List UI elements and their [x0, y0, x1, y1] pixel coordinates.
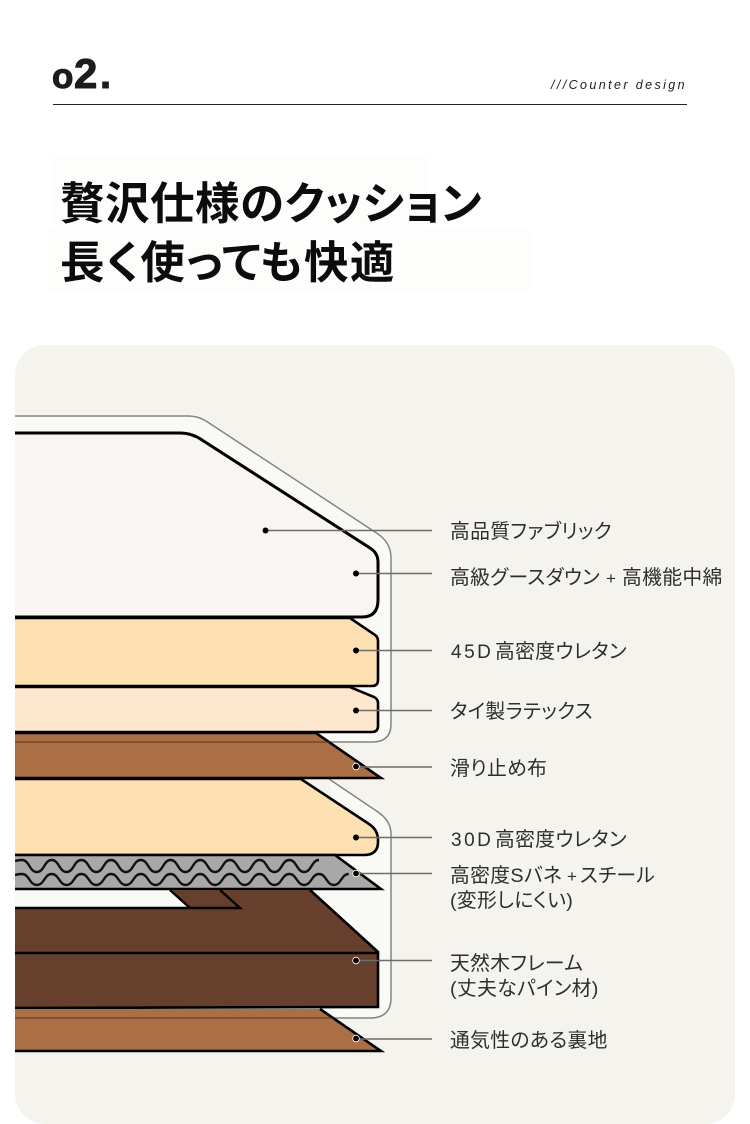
- leader: 30D foam: [353, 834, 432, 840]
- leader: fabric: [262, 528, 432, 534]
- section number: 2: [74, 50, 97, 97]
- lower cover edge: [329, 779, 391, 1018]
- section number: o: [52, 57, 73, 96]
- label: fabric: 高品質ファブリック: [450, 520, 612, 543]
- header rule: [53, 104, 687, 105]
- label: frame: 天然木フレーム: [450, 953, 583, 975]
- layer: breathable lining: [5, 1009, 381, 1051]
- section number: .: [100, 53, 111, 97]
- label: lining: 通気性のある裏地: [450, 1030, 608, 1052]
- layer: S-spring: [5, 855, 381, 889]
- section tag: ///Counter design: [550, 78, 687, 92]
- layer: 45D foam: [5, 618, 378, 686]
- label: spring: スチール: [580, 865, 655, 887]
- lower cover fill: [5, 779, 391, 1018]
- label: down: +: [606, 569, 616, 588]
- layer: anti-slip cloth: [5, 733, 381, 778]
- label: spring: 高密度Sバネ: [450, 865, 562, 887]
- panel: background: [15, 345, 735, 1124]
- label: frame: (丈夫なパイン材): [450, 978, 599, 1000]
- leader: spring: [353, 870, 432, 877]
- title: [48, 155, 530, 292]
- leader: frame: [353, 957, 432, 964]
- left page margin: [0, 400, 15, 1080]
- leader: anti-slip cloth: [353, 763, 432, 770]
- label: spring: (変形しにくい): [450, 890, 573, 912]
- label: anti-slip cloth: 滑り止め布: [450, 758, 547, 780]
- leader: lining: [353, 1035, 432, 1042]
- title: 贅沢仕様のクッション: [60, 167, 482, 232]
- label: down: 高機能中綿: [622, 567, 723, 589]
- layer: 30D foam: [5, 779, 378, 855]
- leader: 45D foam: [353, 648, 432, 654]
- label: 45D foam: 高密度ウレタン: [495, 641, 627, 663]
- label: spring: +: [567, 867, 577, 886]
- label: 30D foam: 30D: [451, 830, 493, 851]
- layer: wooden frame: [5, 890, 378, 1008]
- leader: down: [353, 570, 432, 576]
- layer: down cushion: [5, 433, 378, 617]
- label: down: 高級グースダウン: [450, 567, 600, 589]
- layer: latex: [5, 687, 378, 732]
- label: latex: タイ製ラテックス: [450, 701, 593, 723]
- upper cover outline: [5, 416, 391, 742]
- leader: latex: [353, 708, 432, 714]
- label: 30D foam: 高密度ウレタン: [495, 829, 627, 851]
- title: 長く使っても快適: [60, 226, 396, 291]
- label: 45D foam: 45D: [451, 642, 493, 663]
